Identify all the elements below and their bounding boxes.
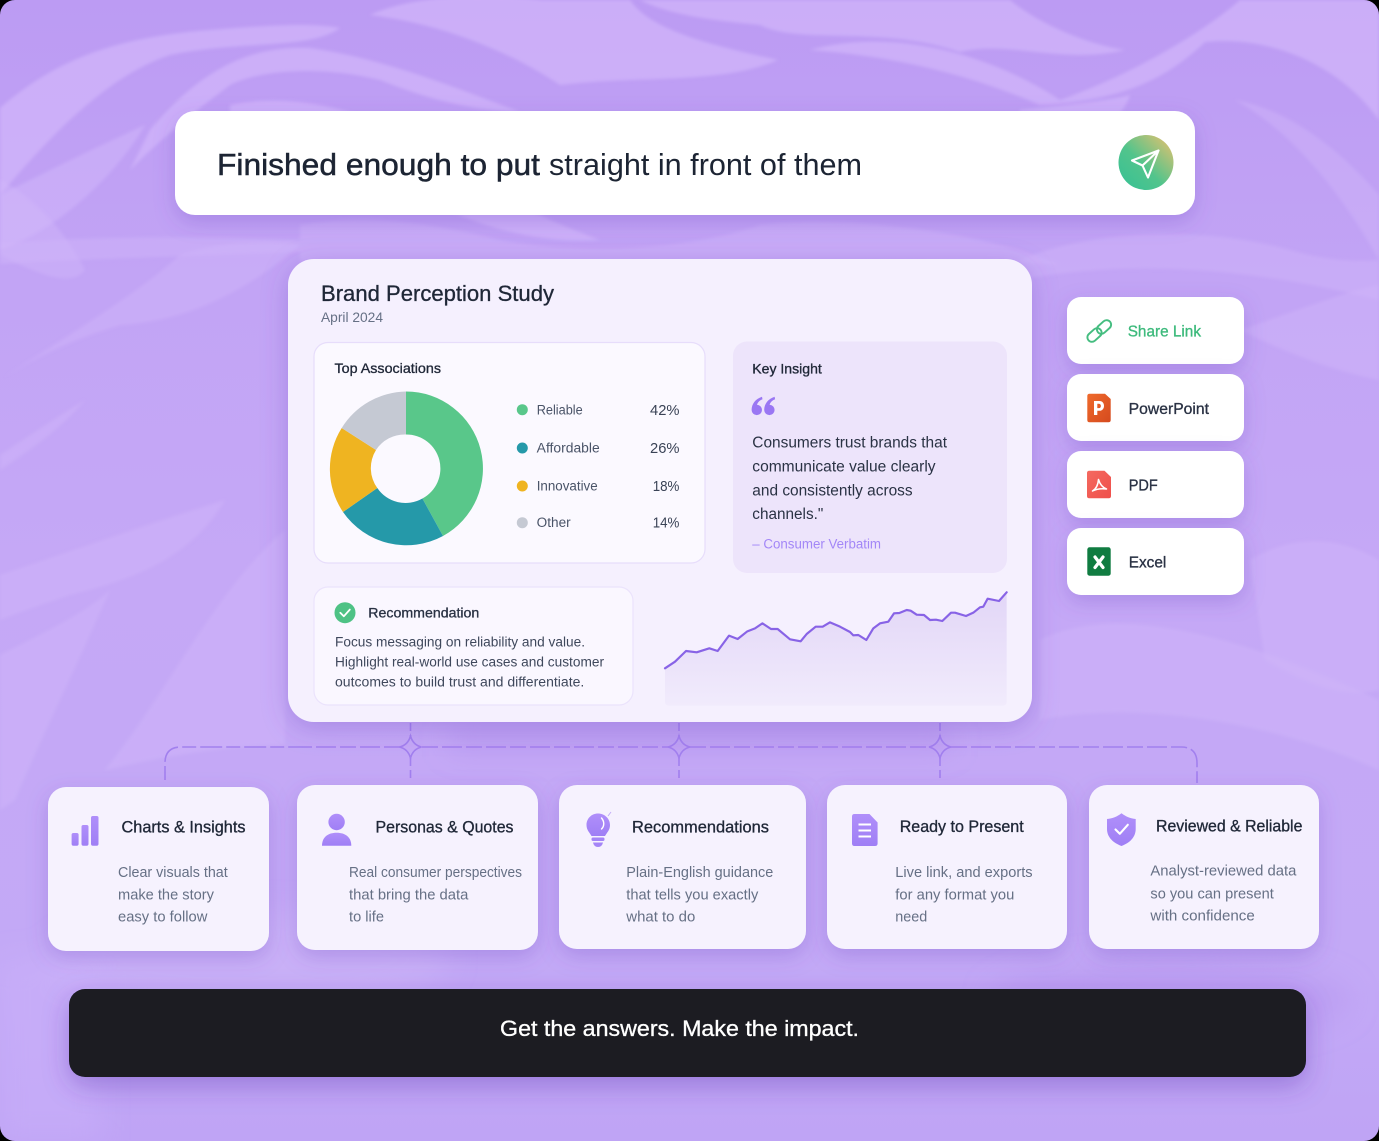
quote text: communicate value clearly — [752, 458, 936, 475]
icon: shield — [1107, 813, 1136, 846]
recommendation text — [335, 635, 605, 690]
feature card: personas and quotes: Personas & Quotes — [376, 818, 514, 836]
card text: need — [895, 910, 927, 926]
panel: recommendation — [314, 587, 633, 705]
export options — [1067, 297, 1244, 595]
quote attribution: – Consumer Verbatim — [752, 536, 881, 551]
feature card: recommendations — [559, 785, 806, 949]
button: powerpoint — [1067, 374, 1244, 441]
legend: innovative: 18% — [653, 478, 679, 495]
icon: pdf file — [1087, 471, 1111, 498]
recommendation text: Focus messaging on reliability and value. — [335, 635, 585, 650]
card text: make the story — [118, 887, 215, 903]
prompt heading text: straight in front of them — [549, 147, 862, 182]
quote text: channels." — [752, 506, 823, 523]
legend: reliable: Reliable — [537, 402, 583, 418]
feature card: recommendations: Recommendations — [632, 818, 769, 836]
icon: light bulb — [586, 812, 611, 847]
heading: top associations: Top Associations — [334, 360, 441, 376]
button: pdf: PDF — [1129, 478, 1158, 495]
card text: with confidence — [1149, 909, 1255, 925]
card text: what to do — [625, 910, 695, 926]
feature card: charts and insights — [48, 787, 269, 951]
button: excel: Excel — [1129, 554, 1166, 571]
card text — [625, 865, 773, 926]
quote text — [752, 434, 948, 523]
card text — [349, 865, 522, 926]
feature card: ready to present — [827, 785, 1067, 949]
donut chart — [330, 392, 483, 545]
quote text: and consistently across — [752, 482, 913, 499]
feature card: ready to present: Ready to Present — [900, 818, 1024, 836]
legend: affordable: 26% — [650, 440, 680, 457]
icon: green check — [334, 602, 356, 623]
connector lines to feature cards — [165, 723, 1197, 783]
card text: that bring the data — [349, 887, 469, 903]
report date: April 2024 — [321, 310, 383, 325]
panel: brand perception report — [288, 259, 1032, 722]
button: powerpoint: PowerPoint — [1129, 401, 1210, 418]
legend: affordable: Affordable — [537, 441, 600, 456]
icon: chain link — [1086, 318, 1113, 344]
feature card: charts and insights: Charts & Insights — [122, 819, 246, 837]
recommendation text: Highlight real-world use cases and customer — [335, 655, 605, 670]
card text: that tells you exactly — [626, 887, 759, 903]
search prompt bar — [175, 111, 1195, 215]
legend: other — [517, 514, 679, 532]
panel: top associations — [314, 342, 705, 563]
button: excel — [1067, 528, 1244, 595]
card text: Plain-English guidance — [626, 865, 773, 881]
card text: Analyst-reviewed data — [1150, 864, 1297, 880]
card text — [118, 865, 228, 926]
icon: excel file — [1087, 547, 1111, 576]
heading: key insight: Key Insight — [752, 360, 822, 376]
legend: reliable: 42% — [650, 402, 680, 419]
icon: powerpoint file — [1087, 394, 1111, 422]
legend: innovative — [517, 478, 679, 495]
card text: to life — [349, 910, 384, 926]
prompt heading text: Finished enough to put — [217, 147, 540, 182]
card text: Live link, and exports — [895, 865, 1033, 881]
card text: Real consumer perspectives — [349, 865, 522, 881]
button: pdf — [1067, 451, 1244, 518]
icon: bar chart — [72, 816, 98, 846]
card text — [895, 865, 1033, 926]
report title: Brand Perception Study — [321, 281, 555, 306]
legend: other: 14% — [653, 514, 679, 532]
button: share link: Share Link — [1128, 324, 1201, 341]
card text: easy to follow — [118, 910, 208, 926]
feature card: reviewed and reliable: Reviewed & Reliable — [1156, 817, 1302, 835]
panel: key insight — [733, 342, 1007, 573]
call to action banner — [69, 989, 1306, 1077]
quote text: Consumers trust brands that — [752, 434, 948, 451]
icon: document — [852, 814, 878, 846]
card text: so you can present — [1150, 886, 1274, 902]
button: share link — [1067, 297, 1244, 364]
icon: quotation mark — [752, 397, 775, 415]
icon: person — [322, 814, 351, 846]
prompt heading text — [217, 147, 862, 182]
feature card: reviewed and reliable — [1089, 785, 1319, 949]
icon: send button — [1118, 135, 1174, 190]
feature card: personas and quotes — [297, 785, 538, 950]
call to action banner: Get the answers. Make the impact. — [500, 1016, 859, 1041]
card text — [1149, 864, 1297, 925]
card text: Clear visuals that — [118, 865, 228, 881]
card text: for any format you — [895, 887, 1014, 903]
legend: affordable — [517, 440, 680, 457]
legend: other: Other — [537, 515, 571, 530]
heading: recommendation: Recommendation — [368, 605, 479, 621]
line chart — [665, 592, 1007, 706]
recommendation text: outcomes to build trust and differentiate. — [335, 675, 584, 690]
legend: reliable — [517, 402, 680, 419]
legend: innovative: Innovative — [537, 478, 598, 494]
